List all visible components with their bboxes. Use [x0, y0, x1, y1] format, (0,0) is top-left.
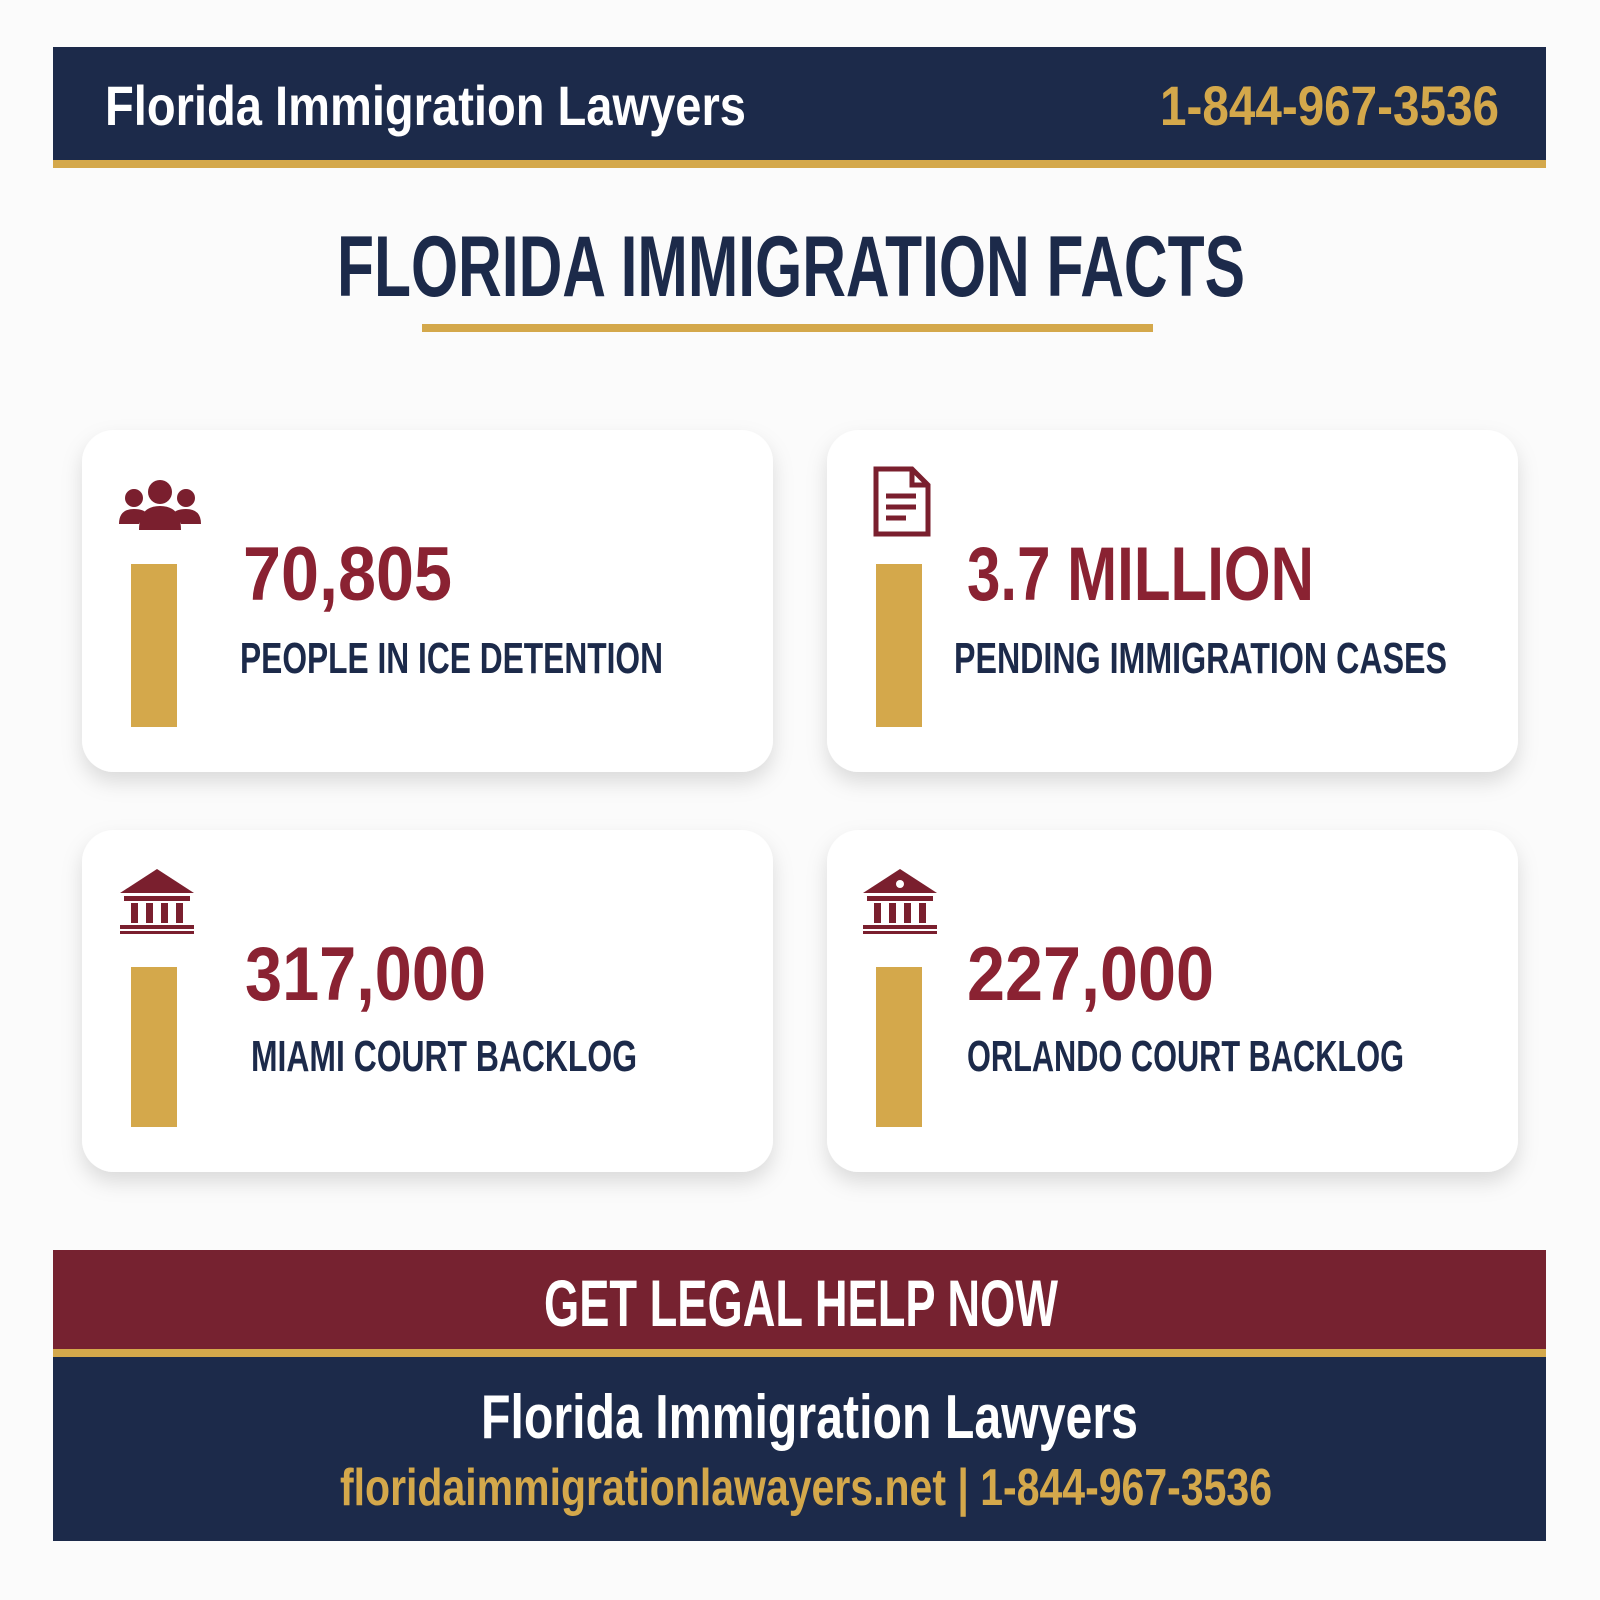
stat label: PEOPLE IN ICE DETENTION: [240, 634, 663, 683]
header firm name: Florida Immigration Lawyers: [105, 74, 746, 137]
stat number: 70,805: [243, 532, 452, 617]
stat number: 227,000: [967, 932, 1214, 1017]
panel: ICE detention: [82, 430, 773, 772]
panel: Orlando backlog: [827, 830, 1518, 1172]
footer call to action: [53, 1250, 1546, 1350]
icon: courthouse: [120, 869, 194, 934]
stat label: ORLANDO COURT BACKLOG: [967, 1032, 1404, 1081]
footer call to action: GET LEGAL HELP NOW: [544, 1266, 1058, 1340]
icon: people: [119, 480, 201, 530]
footer firm name: Florida Immigration Lawyers: [481, 1383, 1138, 1452]
stat number: 3.7 MILLION: [967, 532, 1314, 617]
panel: Miami backlog: [82, 830, 773, 1172]
panel: pending cases: [827, 430, 1518, 772]
title: [337, 219, 1245, 332]
header phone: 1-844-967-3536: [1160, 74, 1499, 137]
header bar: [53, 47, 1546, 168]
footer url and phone: floridaimmigrationlawayers.net | 1-844-967-3536: [340, 1459, 1272, 1517]
title: FLORIDA IMMIGRATION FACTS: [337, 219, 1245, 315]
stat number: 317,000: [245, 932, 486, 1017]
footer contact: [53, 1349, 1546, 1541]
icon: courthouse: [863, 869, 937, 934]
icon: document: [876, 469, 928, 534]
stat label: MIAMI COURT BACKLOG: [251, 1032, 637, 1081]
